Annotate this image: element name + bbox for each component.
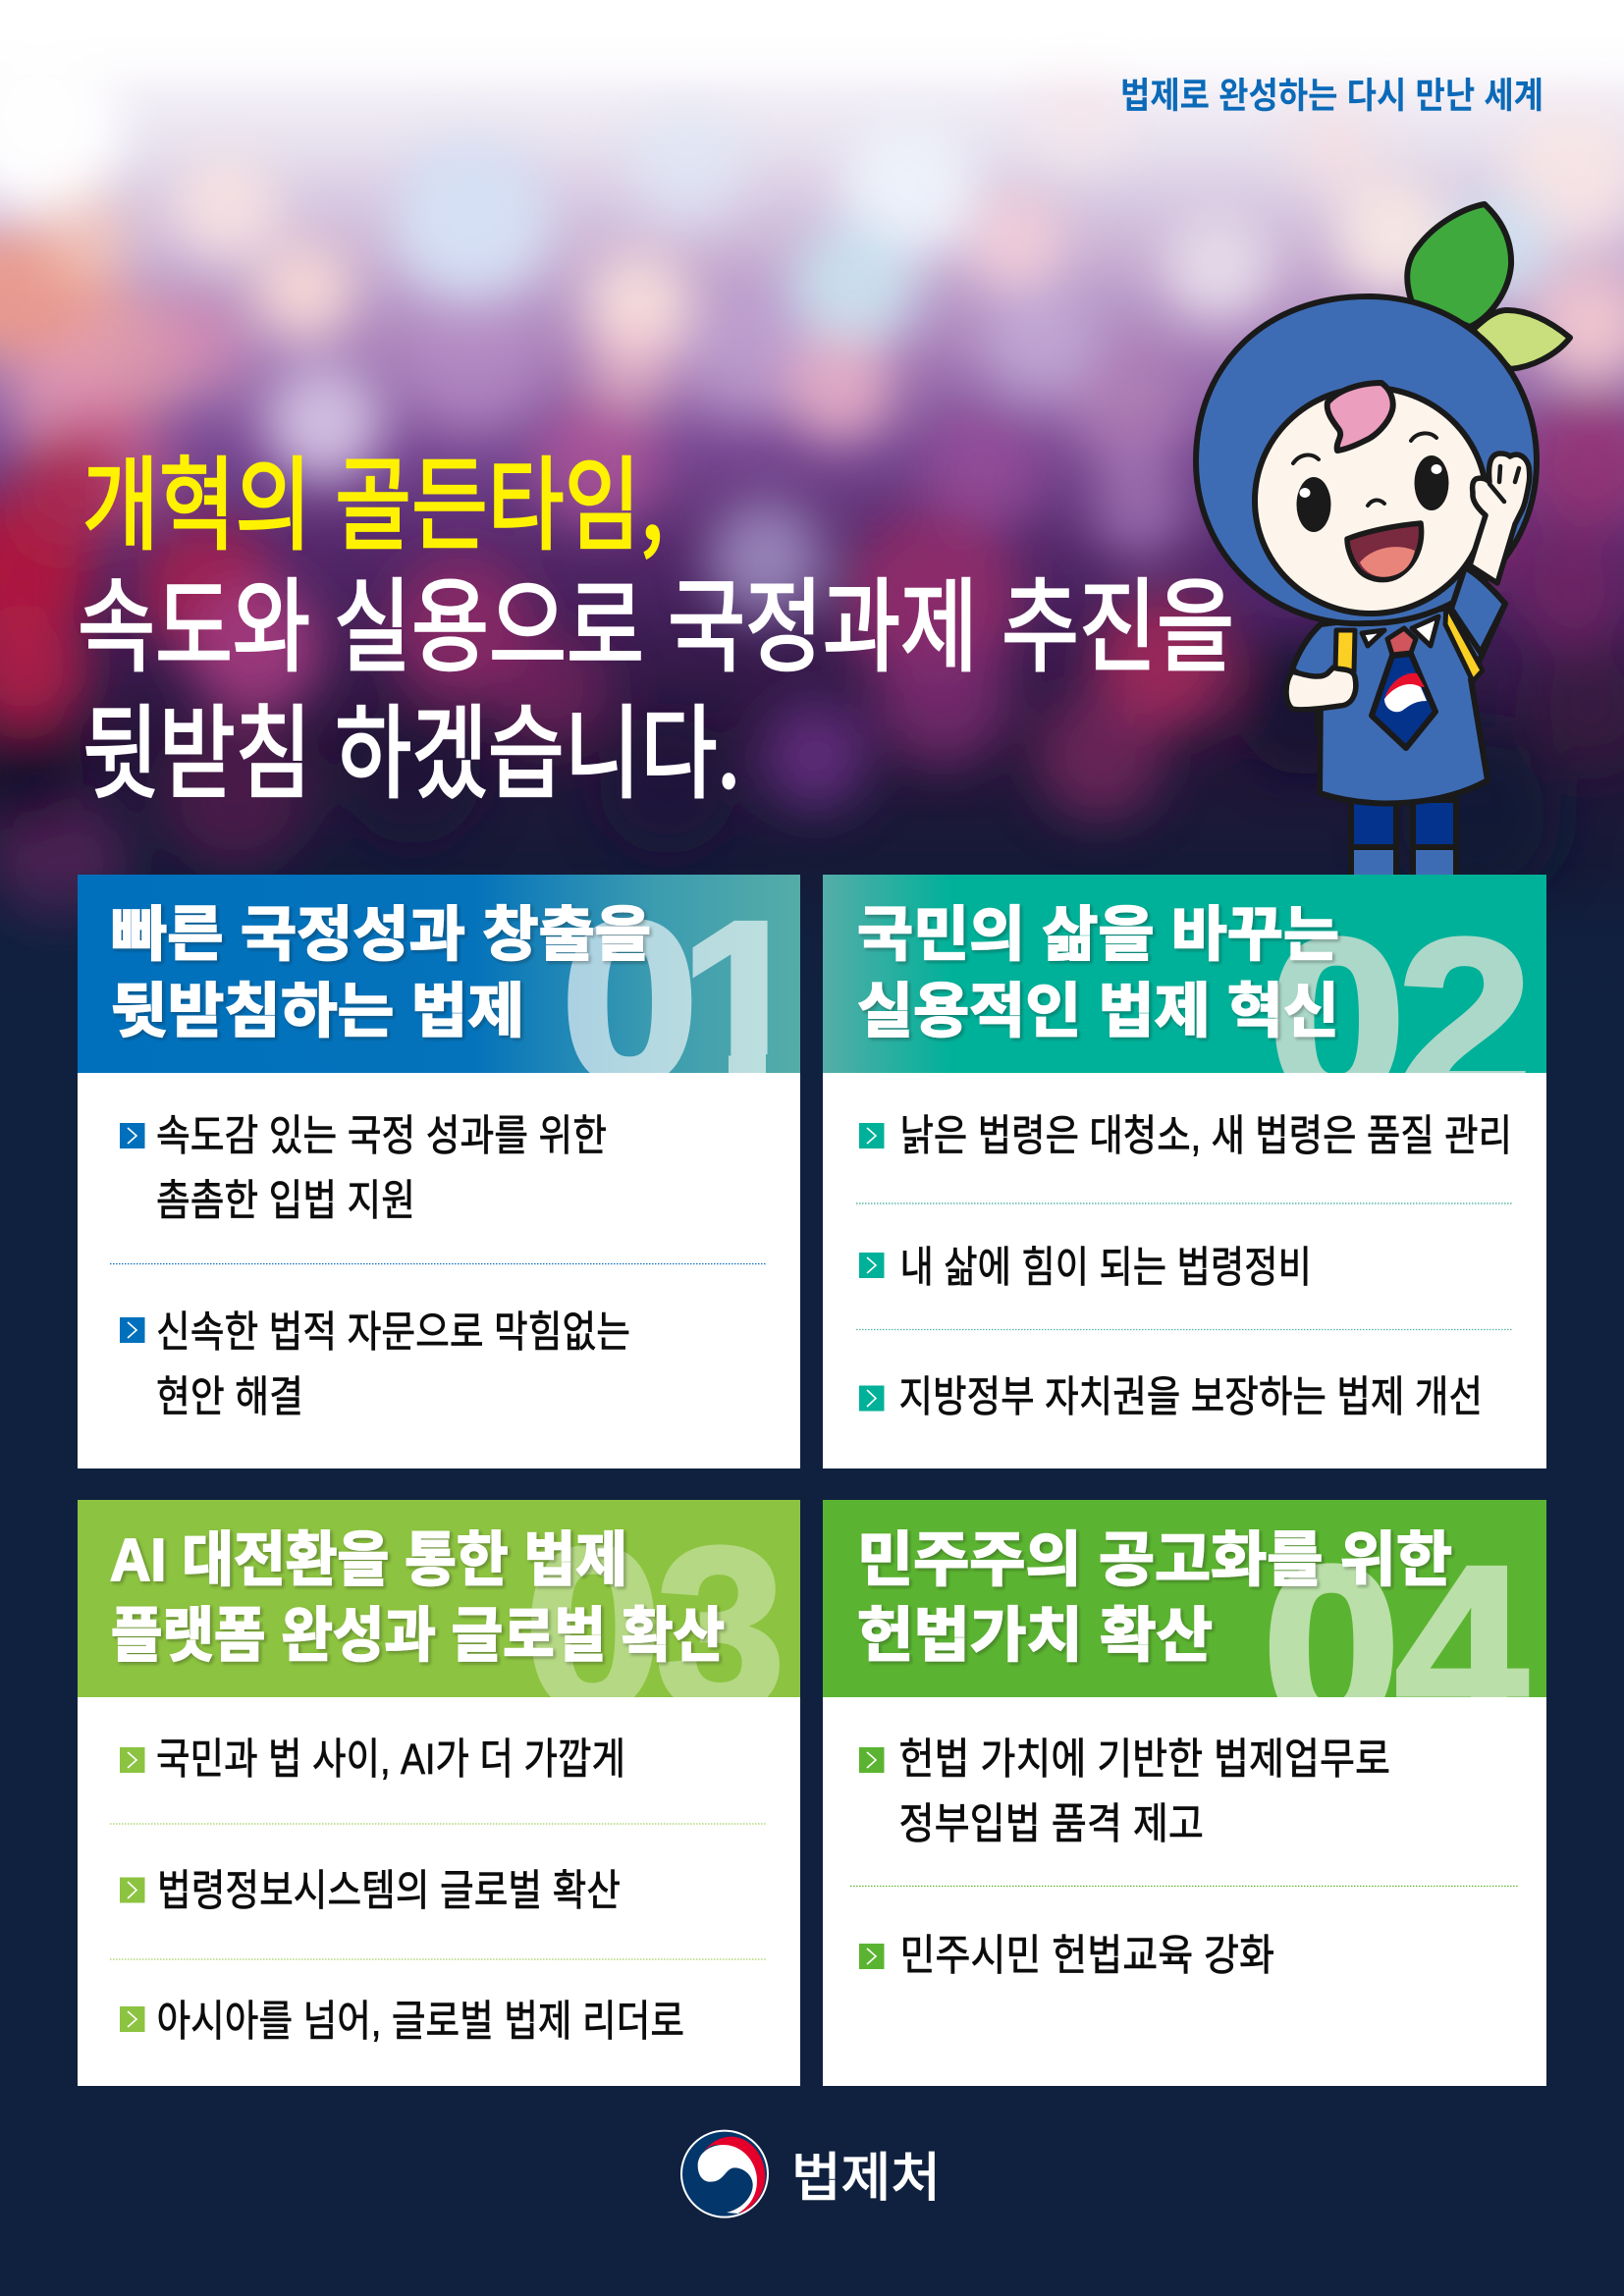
mascot back strap <box>1317 703 1326 741</box>
mascot body <box>1292 567 1505 803</box>
panel 01 item 2: 신속한 법적 자문으로 막힘없는 <box>156 1308 630 1357</box>
panel 02 header: 국민의 삶을 바꾸는 <box>857 901 1339 968</box>
panel 04 header: 0 <box>1263 1518 1400 1776</box>
mascot mouth <box>1347 523 1422 580</box>
logo wordmark: 법제처 <box>791 2149 941 2208</box>
panel 04 item 2: 민주시민 헌법교육 강화 <box>899 1932 1274 1980</box>
mascot eyebrows and nose <box>1293 433 1436 506</box>
panel 04 header: 4 <box>1395 1518 1528 1776</box>
panel 03 header: AI 대전환을 통한 법제 <box>110 1526 627 1593</box>
panel 03 <box>78 1499 800 2086</box>
panel 01 header <box>78 875 800 1073</box>
mascot hood <box>1196 296 1537 623</box>
mascot raised arm and hand <box>1470 454 1530 583</box>
panel 02 item 3: 지방정부 자치권을 보장하는 법제 개선 <box>899 1373 1483 1421</box>
mascot leaf: green <box>1407 204 1511 327</box>
mascot finger lines <box>1489 466 1519 502</box>
mascot character <box>1196 204 1570 881</box>
panel 02 header: 2 <box>1397 890 1533 1148</box>
panel 03 item 1: 국민과 법 사이, AI가 더 가깝게 <box>156 1735 625 1784</box>
headline <box>78 422 1234 819</box>
panel 01 item 1 <box>120 1112 607 1225</box>
mascot tie <box>1362 616 1438 748</box>
panel 01 item 1: 속도감 있는 국정 성과를 위한 <box>156 1112 607 1160</box>
mascot hair <box>1327 383 1393 451</box>
panel 03 header: 0 <box>524 1499 662 1757</box>
panel 02 header: 0 <box>1268 890 1406 1148</box>
panel 04 header <box>823 1500 1546 1697</box>
panel 01 header: 뒷받침하는 법제 <box>111 978 524 1044</box>
panel 01 item 1: 촘촘한 입법 지원 <box>156 1177 415 1225</box>
mascot leaf: light <box>1473 310 1570 369</box>
panel 01 item 2: 현안 해결 <box>156 1373 303 1421</box>
panel 02 header: 실용적인 법제 혁신 <box>857 978 1339 1044</box>
panel 03 header: 플랫폼 완성과 글로벌 확산 <box>111 1602 725 1669</box>
mascot eyes <box>1296 455 1449 532</box>
panel 02 header <box>823 875 1546 1073</box>
panel 01 header: 1 <box>679 873 808 1131</box>
panel 02 item 2: 내 삶에 힘이 되는 법령정비 <box>899 1244 1312 1292</box>
footer logo <box>681 2131 941 2217</box>
headline line 1: 개혁의 골든타임, <box>82 422 664 570</box>
panel 02 <box>823 875 1546 1468</box>
panel 04 item 1 <box>859 1735 1390 1848</box>
mascot face <box>1255 388 1487 614</box>
subtitle: top-right slogan: 법제로 완성하는 다시 만난 세계 <box>1120 76 1543 116</box>
headline line 3: 뒷받침 하겠습니다. <box>82 670 740 819</box>
panel 03 item 3: 아시아를 넘어, 글로벌 법제 리더로 <box>157 1998 684 2046</box>
panel 01 header: 0 <box>561 873 699 1131</box>
headline line 2: 속도와 실용으로 국정과제 추진을 <box>78 544 1234 692</box>
icon: taegeuk emblem <box>681 2131 768 2217</box>
mascot straps <box>1335 605 1483 681</box>
panel 03 header <box>78 1500 800 1697</box>
panel 01 header: 빠른 국정성과 창출을 <box>111 901 651 968</box>
mascot left hand <box>1286 667 1356 710</box>
panel 01 <box>78 873 808 1468</box>
mascot sleeve <box>1451 567 1505 653</box>
panel 04 <box>823 1500 1546 2086</box>
panel 04 header: 헌법가치 확산 <box>857 1602 1213 1669</box>
panel 04 header: 민주주의 공고화를 위한 <box>857 1526 1452 1593</box>
mascot legs <box>1351 800 1456 881</box>
panel 02 item 1: 낡은 법령은 대청소, 새 법령은 품질 관리 <box>899 1112 1512 1160</box>
panel 03 item 2: 법령정보시스템의 글로벌 확산 <box>157 1867 621 1915</box>
panel 04 item 1: 헌법 가치에 기반한 법제업무로 <box>899 1735 1390 1784</box>
panel 03 header: 3 <box>656 1499 785 1757</box>
panel 01 item 2 <box>120 1308 630 1421</box>
panel 04 item 1: 정부입법 품격 제고 <box>899 1800 1204 1848</box>
